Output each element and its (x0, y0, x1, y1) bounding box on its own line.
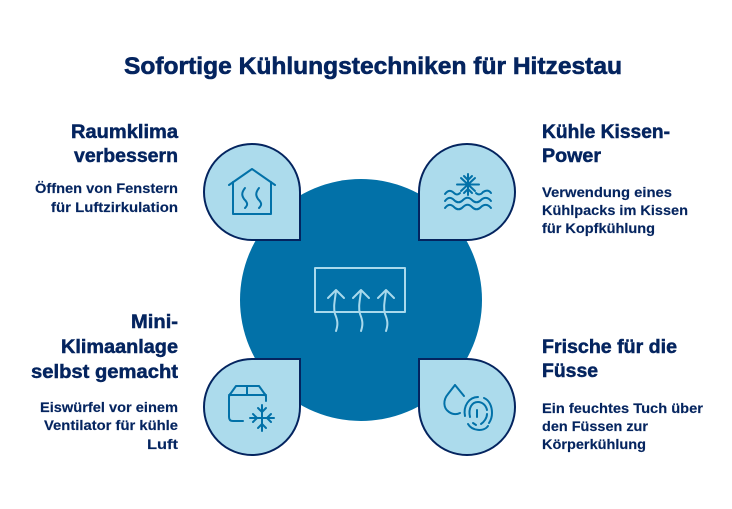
body text line 3: für Kopfkühlung (542, 220, 655, 236)
panel: Mini-Klimaanlage selbst gemacht (31, 311, 300, 455)
panel: Kühle Kissen-Power (419, 121, 688, 240)
body text: Verwendung eines (542, 184, 672, 200)
icon: box with snowflake (229, 386, 274, 431)
heading line 2: Füsse (542, 360, 598, 382)
drop shape bottom right (419, 359, 515, 455)
panel: Raumklima verbessern (35, 121, 300, 240)
heading: Mini- (131, 311, 178, 333)
central circle (240, 179, 482, 421)
body text line 3: Körperkühlung (542, 436, 646, 452)
body text line 2: für Luftzirkulation (51, 199, 178, 215)
heading: Kühle Kissen- (542, 121, 670, 143)
body text: Eiswürfel vor einem (40, 399, 178, 415)
body text line 3: Luft (147, 436, 178, 452)
heading line 3: selbst gemacht (31, 361, 179, 383)
body text line 2: Ventilator für kühle (44, 417, 178, 433)
drop shape bottom left (204, 359, 300, 455)
panel: Frische für die Füsse (419, 336, 704, 455)
drop shape top right (419, 144, 515, 240)
icon: house with heat waves (229, 169, 275, 214)
heading line 2: Klimaanlage (61, 336, 178, 358)
body text line 2: Kühlpacks im Kissen (542, 202, 688, 218)
icon: water drop and fingerprint (444, 385, 492, 430)
heading line 2: verbessern (74, 145, 178, 167)
drop shape top left (204, 144, 300, 240)
body text: Öffnen von Fenstern (35, 180, 178, 196)
heading line 2: Power (542, 145, 601, 167)
icon: snowflake above waves (445, 174, 491, 209)
icon: central heat rising into panel (315, 268, 405, 331)
body text: Ein feuchtes Tuch über (542, 400, 704, 416)
heading: Frische für die (542, 336, 677, 358)
body text line 2: den Füssen zur (542, 418, 649, 434)
heading: Raumklima (71, 121, 178, 143)
title: Sofortige Kühlungstechniken für Hitzestau (124, 53, 622, 80)
